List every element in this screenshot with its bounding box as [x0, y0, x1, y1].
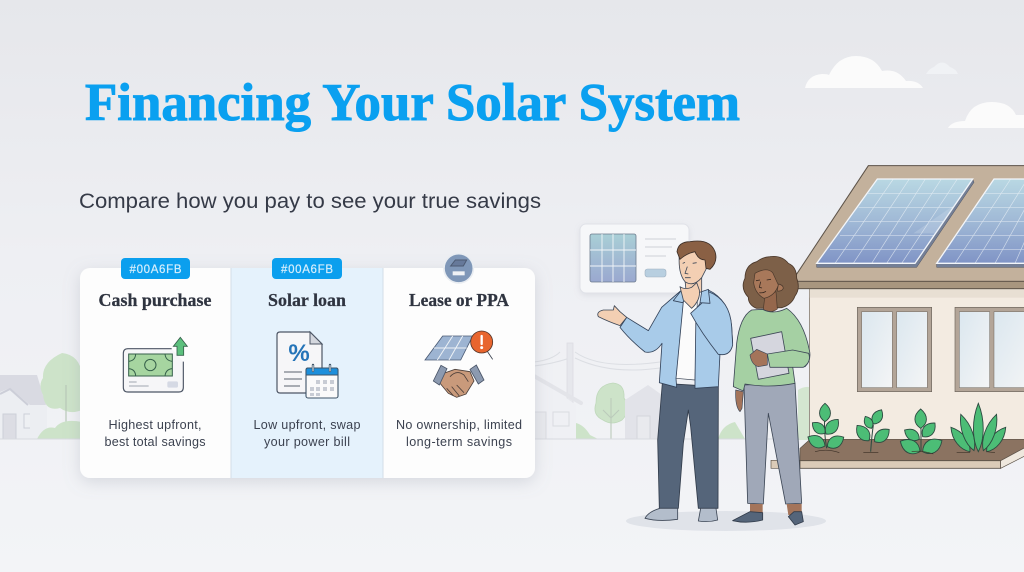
man trousers — [658, 383, 718, 508]
panel: cash purchase — [98, 258, 212, 449]
plant 2 — [853, 407, 893, 453]
badge: loan — [272, 258, 342, 279]
text: cash description: best total savings — [104, 435, 206, 449]
text: cash description: Highest upfront, — [108, 418, 202, 432]
window left — [857, 307, 932, 392]
badge: lease icon circle — [444, 254, 473, 283]
man hair — [677, 241, 716, 269]
woman ankles and shoes — [733, 504, 803, 525]
icon: loan document with calendar — [277, 332, 338, 398]
man shirt — [676, 300, 697, 380]
badge: cash: #00A6FB — [130, 264, 182, 276]
man open hand — [598, 306, 627, 326]
icon: cash with up arrow — [123, 337, 187, 392]
solar panel left — [817, 179, 974, 267]
heading: cash purchase: Cash purchase — [98, 290, 212, 310]
plant 4 — [947, 403, 1010, 455]
man face details — [683, 262, 697, 278]
panel: lease or PPA — [396, 254, 522, 449]
woman sweater — [733, 308, 810, 391]
badge: cash — [121, 258, 190, 279]
man jacket — [620, 289, 733, 388]
subtitle: Compare how you pay to see your true savings — [79, 190, 541, 213]
man shoes — [645, 508, 718, 522]
woman hair — [743, 256, 798, 308]
panel: solar loan — [254, 258, 360, 449]
house wall — [809, 287, 1024, 443]
icon: loan document with calendar: % — [288, 340, 310, 367]
icon: solar panel with alert and handshake — [425, 331, 493, 397]
text: lease description: No ownership, limited — [396, 418, 522, 432]
roof — [792, 166, 1024, 289]
background neighbourhood left — [0, 353, 82, 439]
text: lease description: long-term savings — [406, 435, 512, 449]
man hand on chin — [680, 283, 700, 308]
planter bed — [771, 439, 1024, 468]
woman trousers — [744, 383, 802, 504]
comparison card panel — [80, 254, 535, 478]
woman arm and hand — [750, 349, 809, 367]
plant 1 — [805, 403, 847, 453]
woman hand at side — [736, 390, 743, 412]
text: loan description: Low upfront, swap — [254, 418, 360, 432]
text: loan description: your power bill — [264, 435, 350, 449]
heading: lease or PPA: Lease or PPA — [409, 290, 509, 310]
badge: loan: #00A6FB — [281, 264, 333, 276]
woman figure — [733, 256, 810, 525]
background neighbourhood centre — [534, 343, 812, 440]
plant 3 — [897, 409, 945, 458]
house with solar panels — [771, 166, 1024, 468]
man figure — [598, 241, 733, 522]
solar panel right — [937, 179, 1024, 267]
ground shadow — [626, 511, 826, 531]
title: Financing Your Solar System — [85, 74, 740, 132]
man neck and head — [679, 249, 711, 297]
window right — [955, 307, 1024, 392]
woman tablet — [751, 332, 789, 379]
solar proposal card behind man — [580, 224, 689, 293]
heading: solar loan: Solar loan — [268, 290, 346, 310]
woman face — [754, 270, 783, 312]
clouds — [805, 56, 1024, 128]
